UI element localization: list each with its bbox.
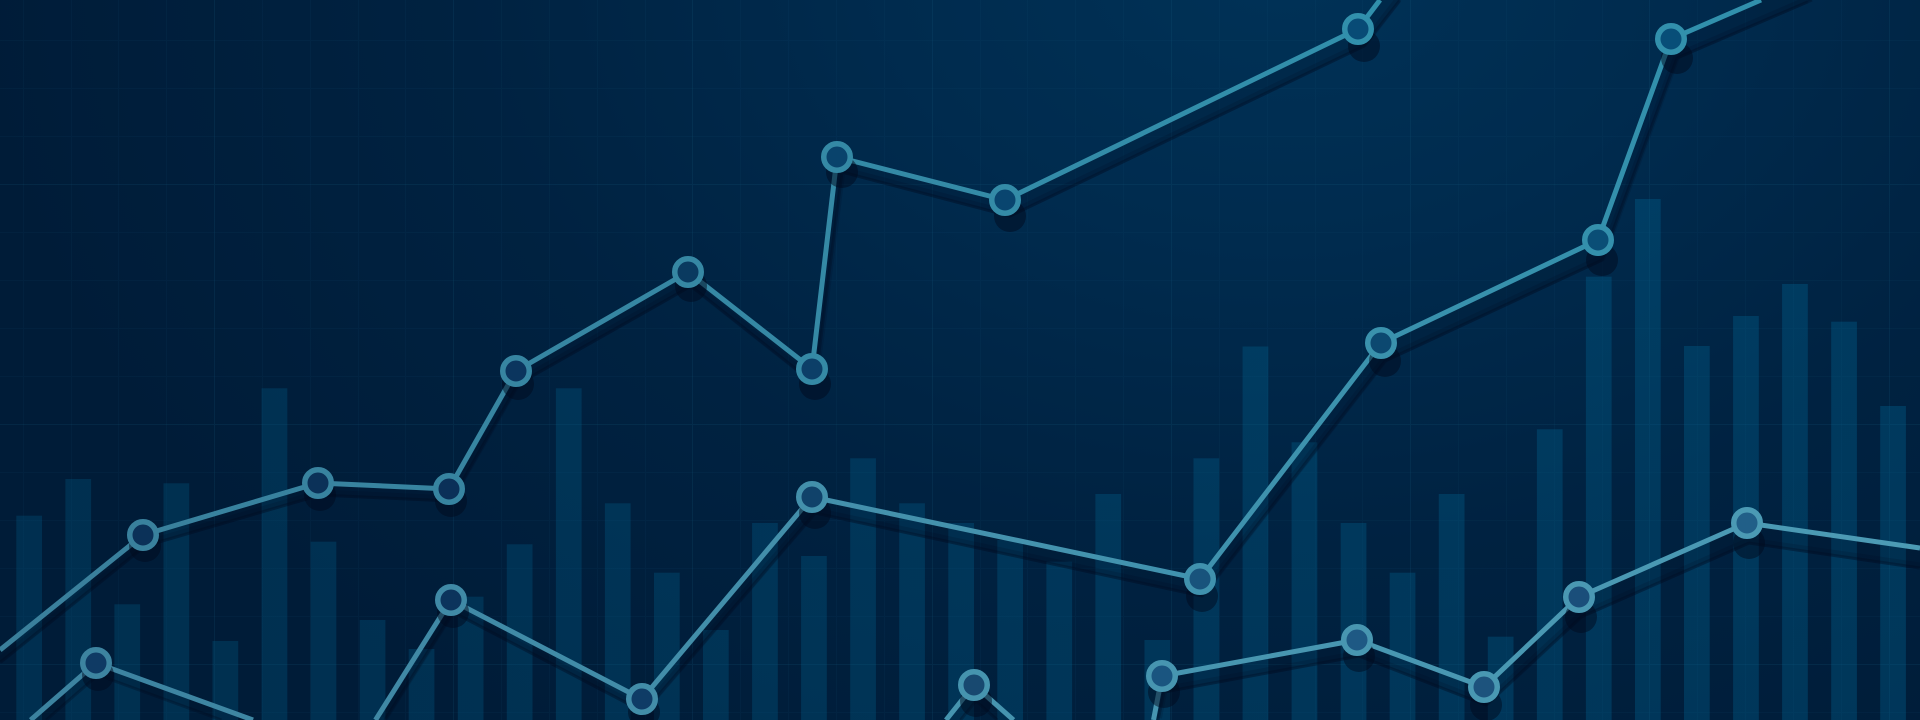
line series: top — [0, 0, 1400, 662]
bar chart — [16, 199, 1906, 720]
line series: bottom — [946, 510, 1920, 720]
